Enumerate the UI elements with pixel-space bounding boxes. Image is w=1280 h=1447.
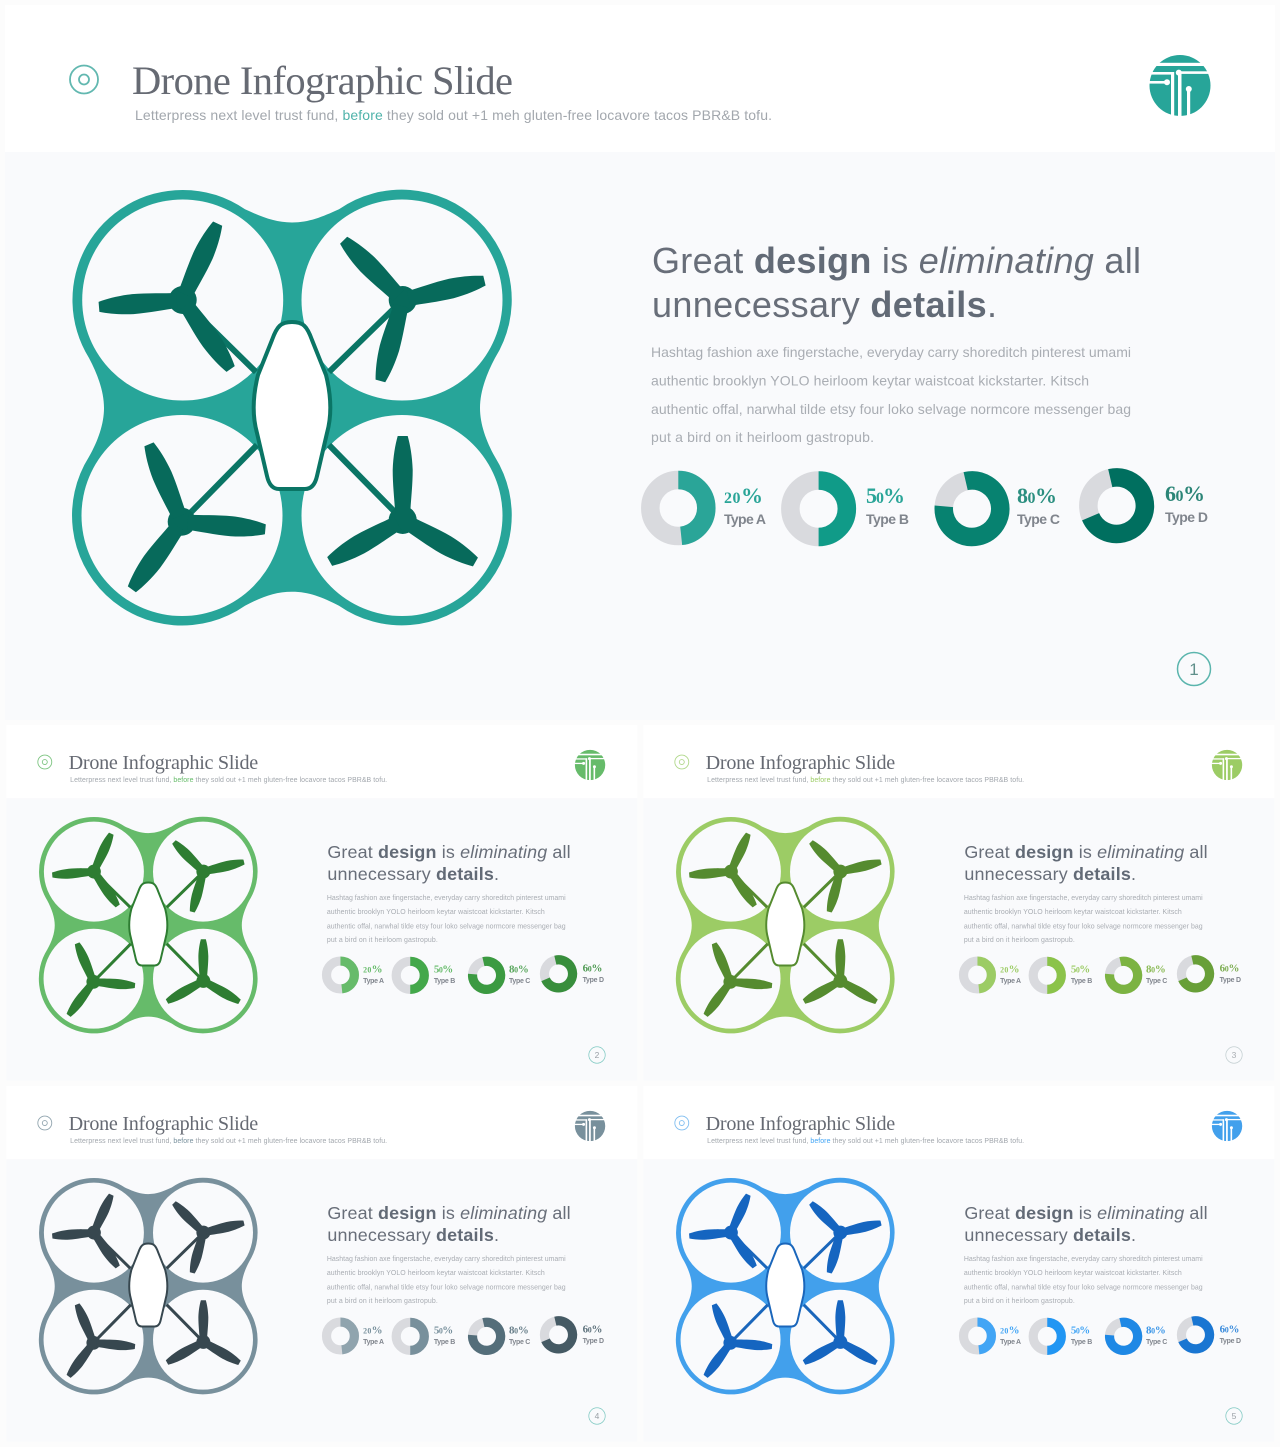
- donut: type D: [542, 957, 604, 991]
- drone frame: [676, 817, 895, 1033]
- icon: logo: [1210, 1111, 1244, 1142]
- header band: [643, 1086, 1274, 1159]
- body text: authentic offal, narwhal tilde etsy four loko selvage normcore messenger bag: [651, 401, 1131, 417]
- page number: 4: [595, 1411, 600, 1421]
- header band: [6, 1086, 637, 1159]
- heading: unnecessary details.: [964, 1225, 1136, 1245]
- donut: type C: Type C: [509, 1339, 530, 1346]
- rotor openings: [681, 822, 890, 1029]
- donut: type B: Type B: [1071, 1339, 1092, 1346]
- title: Drone Infographic Slide: [706, 1113, 895, 1135]
- body text: put a bird on it heirloom gastropub.: [964, 1298, 1075, 1305]
- donut: type A: Type A: [363, 978, 384, 985]
- icon: logo: [573, 750, 607, 781]
- heading: unnecessary details.: [964, 864, 1136, 884]
- slide 5: blue panel: [643, 1086, 1274, 1441]
- drone arms: [93, 1233, 203, 1343]
- rotor openings: [44, 822, 253, 1029]
- propellers: [689, 832, 882, 1018]
- donut: type A: [964, 1322, 1021, 1350]
- panel background: [643, 1159, 1274, 1441]
- page number: 1: [1189, 660, 1199, 679]
- body text: [651, 344, 1131, 445]
- donut: type C: 80%: [1146, 1325, 1166, 1337]
- body text: authentic brooklyn YOLO heirloom keytar waistcoat kickstarter. Kitsch: [651, 372, 1089, 388]
- donut: type D: 60%: [583, 1324, 602, 1336]
- donut: type D: [1179, 957, 1241, 991]
- heading: unnecessary details.: [327, 1225, 499, 1245]
- drone body: [254, 322, 330, 489]
- body text: authentic brooklyn YOLO heirloom keytar waistcoat kickstarter. Kitsch: [327, 909, 545, 916]
- donut: type A: [327, 1322, 384, 1350]
- donut: type A: 20%: [724, 483, 763, 508]
- body text: Hashtag fashion axe fingerstache, everyday carry shoreditch pinterest umami: [651, 344, 1131, 360]
- page number: [1226, 1047, 1242, 1063]
- propellers: [689, 1193, 882, 1379]
- icon: target: [70, 66, 98, 94]
- subtitle: Letterpress next level trust fund, before they sold out +1 meh gluten-free locavore tacos PBR&B tofu.: [707, 1138, 1024, 1145]
- icon: logo: [1210, 750, 1244, 781]
- body text: put a bird on it heirloom gastropub.: [327, 937, 438, 944]
- donut: type C: Type C: [1146, 1339, 1167, 1346]
- drone illustration: [39, 817, 258, 1033]
- heading: [327, 1203, 571, 1245]
- donut: type D: Type D: [1220, 977, 1241, 984]
- donut: type A: 20%: [363, 1325, 383, 1337]
- rotor openings: [82, 200, 502, 616]
- donut: type C: [1107, 1320, 1167, 1353]
- drone arms: [730, 872, 840, 982]
- donut: type C: 80%: [509, 1325, 529, 1337]
- body text: put a bird on it heirloom gastropub.: [964, 937, 1075, 944]
- donut: type A: 20%: [1000, 964, 1020, 976]
- donut: type B: 50%: [1071, 964, 1090, 976]
- drone illustration: [676, 1178, 895, 1394]
- donut: type D: Type D: [1165, 509, 1208, 525]
- header band: [643, 725, 1274, 798]
- body text: [964, 1256, 1203, 1305]
- donut: type B: Type B: [1071, 978, 1092, 985]
- donut: type B: [396, 1322, 455, 1350]
- body text: Hashtag fashion axe fingerstache, everyday carry shoreditch pinterest umami: [964, 895, 1203, 902]
- title: Drone Infographic Slide: [69, 752, 258, 774]
- body text: put a bird on it heirloom gastropub.: [651, 429, 874, 445]
- header band: [5, 5, 1275, 152]
- donut: type D: 60%: [583, 963, 602, 975]
- page number: [1226, 1408, 1242, 1424]
- drone body: [129, 883, 167, 966]
- body text: authentic brooklyn YOLO heirloom keytar waistcoat kickstarter. Kitsch: [327, 1270, 545, 1277]
- donut: type B: Type B: [434, 978, 455, 985]
- icon: logo: [573, 1111, 607, 1142]
- donut: type C: 80%: [1146, 964, 1166, 976]
- icon: target: [675, 755, 689, 769]
- subtitle: Letterpress next level trust fund, before they sold out +1 meh gluten-free locavore tacos PBR&B tofu.: [135, 107, 772, 123]
- donut: type D: 60%: [1220, 963, 1239, 975]
- panel background: [5, 152, 1275, 720]
- donut: type C: Type C: [509, 978, 530, 985]
- heading: unnecessary details.: [327, 864, 499, 884]
- page number: 2: [595, 1050, 600, 1060]
- slide 4: slate panel: [6, 1086, 637, 1441]
- body text: authentic offal, narwhal tilde etsy four loko selvage normcore messenger bag: [964, 923, 1203, 930]
- drone frame: [676, 1178, 895, 1394]
- icon: target: [675, 1116, 689, 1130]
- subtitle: Letterpress next level trust fund, before they sold out +1 meh gluten-free locavore tacos PBR&B tofu.: [70, 1138, 387, 1145]
- propellers: [52, 832, 245, 1018]
- page number: [1178, 652, 1210, 686]
- rotor openings: [681, 1183, 890, 1390]
- body text: authentic offal, narwhal tilde etsy four loko selvage normcore messenger bag: [964, 1284, 1203, 1291]
- title: Drone Infographic Slide: [69, 1113, 258, 1135]
- page number: [589, 1408, 605, 1424]
- icon: logo: [1146, 55, 1214, 118]
- drone illustration: [39, 1178, 258, 1394]
- donut: type C: [1107, 959, 1167, 992]
- body text: authentic brooklyn YOLO heirloom keytar waistcoat kickstarter. Kitsch: [964, 909, 1182, 916]
- donut: type C: Type C: [1146, 978, 1167, 985]
- donut: type C: [470, 959, 530, 992]
- icon: target: [38, 1116, 52, 1130]
- panel background: [6, 1159, 637, 1441]
- page number: 5: [1232, 1411, 1237, 1421]
- heading: Great design is eliminating all: [964, 842, 1208, 862]
- subtitle: Letterpress next level trust fund, before they sold out +1 meh gluten-free locavore tacos PBR&B tofu.: [707, 777, 1024, 784]
- body text: Hashtag fashion axe fingerstache, everyday carry shoreditch pinterest umami: [327, 1256, 566, 1263]
- heading: Great design is eliminating all: [652, 240, 1141, 281]
- donut: type C: [470, 1320, 530, 1353]
- donut: type C: 80%: [509, 964, 529, 976]
- donut: type D: [542, 1318, 604, 1352]
- donut: type D: 60%: [1220, 1324, 1239, 1336]
- donut: type A: Type A: [1000, 978, 1021, 985]
- heading: [964, 842, 1208, 884]
- drone frame: [72, 190, 512, 626]
- body text: Hashtag fashion axe fingerstache, everyday carry shoreditch pinterest umami: [327, 895, 566, 902]
- rotor openings: [44, 1183, 253, 1390]
- donut: type D: [1083, 472, 1208, 540]
- donut: type B: 50%: [434, 1325, 453, 1337]
- body text: authentic offal, narwhal tilde etsy four loko selvage normcore messenger bag: [327, 923, 566, 930]
- donut: type B: 50%: [434, 964, 453, 976]
- body text: authentic offal, narwhal tilde etsy four loko selvage normcore messenger bag: [327, 1284, 566, 1291]
- panel background: [643, 798, 1274, 1080]
- donut: type C: Type C: [1017, 511, 1060, 527]
- donut: type B: 50%: [1071, 1325, 1090, 1337]
- drone frame: [39, 1178, 258, 1394]
- donut: type A: Type A: [1000, 1339, 1021, 1346]
- drone arms: [93, 872, 203, 982]
- drone body: [766, 1244, 804, 1327]
- slide 1: teal panel: [5, 5, 1275, 720]
- page number: [589, 1047, 605, 1063]
- donut: type A: [964, 961, 1021, 989]
- drone arms: [182, 300, 403, 522]
- heading: Great design is eliminating all: [327, 842, 571, 862]
- heading: [652, 240, 1141, 325]
- donut: type B: [396, 961, 455, 989]
- donut: type A: 20%: [1000, 1325, 1020, 1337]
- propellers: [52, 1193, 245, 1379]
- icon: target: [38, 755, 52, 769]
- drone body: [766, 883, 804, 966]
- panel background: [6, 798, 637, 1080]
- slide 2: green panel: [6, 725, 637, 1080]
- donut: type B: [790, 480, 909, 537]
- donut: type A: [327, 961, 384, 989]
- donut: type D: Type D: [583, 1338, 604, 1345]
- heading: [327, 842, 571, 884]
- drone illustration: [676, 817, 895, 1033]
- donut: type A: [650, 480, 766, 536]
- page number: 3: [1232, 1050, 1237, 1060]
- donut: type A: Type A: [363, 1339, 384, 1346]
- drone arms: [730, 1233, 840, 1343]
- slide 3: lime panel: [643, 725, 1274, 1080]
- heading: Great design is eliminating all: [964, 1203, 1208, 1223]
- donut: type A: Type A: [724, 511, 766, 527]
- donut: type A: 20%: [363, 964, 383, 976]
- body text: [327, 1256, 566, 1305]
- donut: type B: [1033, 961, 1092, 989]
- subtitle: Letterpress next level trust fund, before they sold out +1 meh gluten-free locavore tacos PBR&B tofu.: [70, 777, 387, 784]
- donut: type C: 80%: [1017, 483, 1057, 508]
- donut: type D: [1179, 1318, 1241, 1352]
- body text: [964, 895, 1203, 944]
- donut: type D: 60%: [1165, 481, 1205, 506]
- heading: Great design is eliminating all: [327, 1203, 571, 1223]
- donut: type B: Type B: [866, 511, 909, 527]
- body text: authentic brooklyn YOLO heirloom keytar waistcoat kickstarter. Kitsch: [964, 1270, 1182, 1277]
- donut: type C: [938, 475, 1060, 543]
- title: Drone Infographic Slide: [132, 58, 513, 103]
- title: Drone Infographic Slide: [706, 752, 895, 774]
- propellers: [98, 219, 487, 595]
- donut: type B: 50%: [866, 483, 905, 508]
- drone illustration: [72, 190, 512, 626]
- drone body: [129, 1244, 167, 1327]
- donut: type B: Type B: [434, 1339, 455, 1346]
- donut: type D: Type D: [583, 977, 604, 984]
- body text: put a bird on it heirloom gastropub.: [327, 1298, 438, 1305]
- heading: [964, 1203, 1208, 1245]
- donut: type D: Type D: [1220, 1338, 1241, 1345]
- header band: [6, 725, 637, 798]
- heading: unnecessary details.: [652, 284, 997, 325]
- donut: type B: [1033, 1322, 1092, 1350]
- drone frame: [39, 817, 258, 1033]
- body text: Hashtag fashion axe fingerstache, everyday carry shoreditch pinterest umami: [964, 1256, 1203, 1263]
- body text: [327, 895, 566, 944]
